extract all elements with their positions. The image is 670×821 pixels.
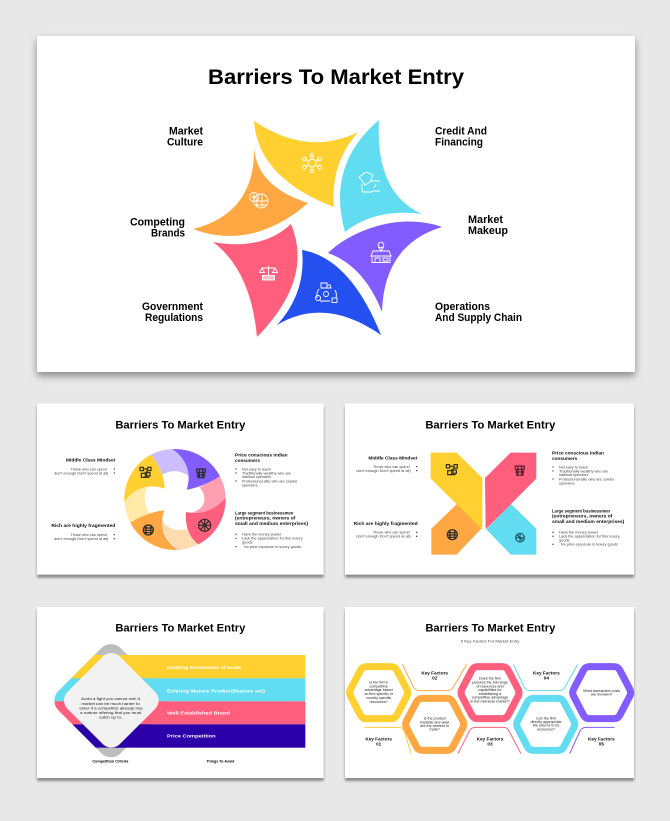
hexagon: key factor 02 <box>406 698 464 750</box>
panel: butterfly x slide <box>345 404 634 578</box>
text block: rich are highly fragmented: Rich are highly fragmented <box>51 523 116 528</box>
text block: rich are highly fragmented: don't enough Don't spend at all) <box>54 537 108 541</box>
hexagon: key factor 01: competitive <box>369 684 388 688</box>
text block: large segment businessmen: (entrepreneurs, owners of <box>235 516 296 521</box>
band: existing economies of scale <box>71 655 306 678</box>
panel: main pinwheel slide <box>37 36 635 376</box>
hexagon: key factor 01 <box>350 667 408 719</box>
label: competing brands: Brands <box>151 228 185 240</box>
text block: large segment businessmen <box>235 510 309 549</box>
label: government regulations: Regulations <box>145 312 203 324</box>
text block: middle class mindset: Those who can spend <box>373 465 410 469</box>
label: key factors 05: Key Factors <box>588 737 615 742</box>
label: key factors 05: 05 <box>599 742 604 747</box>
petal: operations and supply chain (blue) <box>277 250 381 335</box>
slide title: Barriers To Market Entry <box>425 622 555 634</box>
hexagon: key factor 03: possess the full range <box>472 680 508 684</box>
icon: storefront with pin <box>371 242 391 262</box>
icon: hand with cash <box>359 172 380 192</box>
text block: price conscious indian consumers: Price conscious Indian <box>552 451 604 456</box>
hexagon: key factor 03: Does the firm <box>479 677 501 681</box>
hexagon: key factor 03: in the overseas market? <box>470 700 510 704</box>
band: existing mature product <box>54 678 306 702</box>
label: key factors 03 <box>477 737 504 747</box>
hexagon: key factor 01: Is the firm's <box>369 681 388 685</box>
band: price competition <box>49 638 305 763</box>
icon: orange petal <box>143 525 153 535</box>
label: government regulations: Government <box>142 301 203 313</box>
icon: yellow petal <box>140 467 151 477</box>
icon: purple petal <box>197 469 205 478</box>
text block: rich are highly fragmented: Rich are highly fragmented <box>354 521 418 526</box>
label: key factors 04: 04 <box>544 676 549 681</box>
hexagon: key factor 01: resources? <box>370 700 388 704</box>
label: operations and supply chain: Operations <box>435 301 490 313</box>
center diamond callout: Avoid a fight you cannot win! A <box>81 697 141 701</box>
icon: scales of justice <box>260 266 278 280</box>
hexagon: key factor 05: are involved? <box>591 693 613 697</box>
band: well-established brand <box>54 701 306 724</box>
donut chart <box>124 449 226 550</box>
label: key factors 02: 02 <box>432 676 438 681</box>
center diamond callout <box>59 648 164 753</box>
label: competing brands: Competing <box>130 216 185 228</box>
hexagon: key factor 03: capabilities for <box>478 688 502 692</box>
panel: donut slide <box>37 404 324 578</box>
label: competing brands <box>130 216 185 240</box>
hexagon: key factor 03: competitive advantage <box>472 696 508 700</box>
hexagon: key factor 04: the returns to its <box>533 724 559 728</box>
icon: cyan block <box>516 533 524 542</box>
x shape: cyan block <box>486 504 536 555</box>
hexagon: key factor 04: resources? <box>537 728 555 732</box>
text block: price conscious indian consumers: Traditionally wealthy who are <box>242 471 291 475</box>
text block: price conscious indian consumers: Not easy to reach <box>242 467 271 471</box>
hexagon: key factor 03: of resources and <box>476 684 504 688</box>
hexagon: key factor 04 <box>517 698 575 750</box>
band: price competition: Price Competition <box>167 734 216 739</box>
label: key factors 02: Key Factors <box>421 671 448 676</box>
band: existing mature product: Existing Mature Product(feature set) <box>167 688 266 693</box>
label: key factors 01: 01 <box>376 742 382 747</box>
text block: price conscious indian consumers <box>235 453 297 487</box>
x shape: pink block <box>485 453 536 529</box>
hexagon: key factor 04: directly appropriate <box>530 720 562 724</box>
text block: price conscious indian consumers: spenders <box>559 481 575 485</box>
text block: middle class mindset: Those who can spend <box>71 467 107 471</box>
text block: price conscious indian consumers: habitual spenders <box>559 473 588 477</box>
gray diamond backing <box>49 638 173 763</box>
center diamond callout: catch up to. <box>99 716 122 720</box>
icon: yellow block <box>446 465 457 475</box>
petal: government regulations (pink) <box>213 224 298 337</box>
icon: competing brands globe and magnifier <box>250 192 268 208</box>
slide title: Barriers To Market Entry <box>115 622 245 634</box>
text block: rich are highly fragmented: Those who can spend <box>373 531 410 535</box>
text block: middle class mindset: don't enough Don't spend at all) <box>356 469 411 473</box>
text block: rich are highly fragmented: Those who can spend <box>71 533 107 537</box>
text block: price conscious indian consumers: Professional elite who are careful <box>242 479 297 483</box>
text block: price conscious indian consumers <box>552 451 614 485</box>
text block: large segment businessmen: No prior exposure to luxury goods <box>244 545 301 549</box>
label: key factors 02 <box>421 671 448 681</box>
center diamond callout: enter if a competitor already has <box>79 707 143 711</box>
icon: culture flower <box>303 153 321 173</box>
text block: price conscious indian consumers: consumers <box>552 456 578 461</box>
panel: key factors hexagon slide <box>345 607 634 781</box>
label: key factors 01 <box>365 737 392 747</box>
label: market makeup: Makeup <box>468 225 508 237</box>
band: existing economies of scale: Existing Economies of scale <box>167 665 241 670</box>
label: key factors 05 <box>588 737 615 747</box>
label: market makeup: Market <box>468 214 503 226</box>
label: operations and supply chain <box>435 301 522 324</box>
label: key factors 03: Key Factors <box>477 737 504 742</box>
text block: large segment businessmen: goods <box>559 539 570 543</box>
petal: credit and financing (cyan) <box>340 120 422 232</box>
band: well-established brand: Well-Established Brand <box>167 710 230 715</box>
text block: price conscious indian consumers: Traditionally wealthy who are <box>559 469 608 473</box>
panel: competition bars slide <box>37 607 324 781</box>
text block: large segment businessmen: Have the money power <box>242 533 282 537</box>
text block: rich are highly fragmented <box>51 523 116 541</box>
label: market culture <box>167 126 203 148</box>
label: government regulations <box>142 301 203 324</box>
label: key factors 01: Key Factors <box>365 737 392 742</box>
center diamond callout: a mature offering that you must <box>80 711 141 715</box>
label: key factors 04 <box>533 671 560 681</box>
text block: large segment businessmen <box>552 508 625 547</box>
label: market makeup <box>468 214 508 237</box>
text block: large segment businessmen: Lack the appreciation for fine luxury <box>242 537 303 541</box>
label: credit and financing: Financing <box>435 136 483 148</box>
text block: large segment businessmen: Have the money power <box>559 531 599 535</box>
slide title: Barriers To Market Entry <box>115 419 245 431</box>
text block: large segment businessmen: (entrepreneurs, owners of <box>552 514 613 519</box>
subtitle: 5 Key Factors For Market Entry <box>461 639 519 644</box>
text block: rich are highly fragmented <box>354 521 418 539</box>
connector lines <box>365 664 615 754</box>
text block: large segment businessmen: small and medium enterprises) <box>552 519 625 524</box>
label: market culture: Culture <box>167 136 203 148</box>
text block: rich are highly fragmented: don't enough Don't spend at all) <box>356 535 411 539</box>
hexagon: key factor 03 <box>461 667 519 719</box>
text block: price conscious indian consumers: habitual spenders <box>242 475 271 479</box>
text block: price conscious indian consumers: spenders <box>242 483 258 487</box>
hexagon: key factor 01: advantage based <box>365 688 393 692</box>
label: key factors 03: 03 <box>487 742 493 747</box>
caption: competition criteria: Competition Criteria <box>92 760 128 764</box>
petal: market makeup (purple) <box>328 221 442 312</box>
icon: supply chain loop <box>316 283 337 302</box>
label: credit and financing <box>435 126 487 148</box>
hexagon: key factor 02: tradable and what <box>420 720 449 724</box>
hexagon: key factor 01: country specific <box>366 696 391 700</box>
main title: Barriers To Market Entry <box>208 66 464 89</box>
center diamond callout: market can be much harder to <box>81 702 140 706</box>
x shape: orange block <box>431 504 481 555</box>
label: credit and financing: Credit And <box>435 126 487 138</box>
label: key factors 04: Key Factors <box>533 671 560 676</box>
icon: pink petal <box>199 519 211 531</box>
label: operations and supply chain: And Supply Chain <box>435 312 522 324</box>
text block: large segment businessmen: small and medium enterprises) <box>235 521 309 526</box>
hexagon: key factor 02: trade? <box>429 728 440 732</box>
caption: things to avoid: Things To Avoid <box>206 760 234 764</box>
text block: price conscious indian consumers: Professional elite who are careful <box>559 477 614 481</box>
hexagon: key factor 05 <box>573 667 631 719</box>
text block: large segment businessmen: Large segment businessmen <box>235 510 294 515</box>
petal: competing brands (orange) <box>193 145 308 236</box>
x shape: yellow block <box>431 453 482 529</box>
text block: large segment businessmen: Large segment businessmen <box>552 508 610 513</box>
text block: middle class mindset: Middle Class Mindset <box>66 457 116 462</box>
hexagon: key factor 02: are the barriers to <box>420 724 449 728</box>
label: market culture: Market <box>169 126 203 138</box>
text block: middle class mindset <box>356 455 418 473</box>
text block: middle class mindset: don't enough Don't spend at all) <box>54 471 108 475</box>
icon: pink block <box>515 466 524 475</box>
hexagon: key factor 03: establishing a <box>479 692 502 696</box>
text block: large segment businessmen: Lack the appreciation for fine luxury <box>559 535 620 539</box>
petal: market culture (yellow) <box>254 121 358 207</box>
text block: price conscious indian consumers: Not easy to reach <box>559 465 588 469</box>
hexagon: key factor 01: on firm specific or <box>364 692 394 696</box>
hexagon: key factor 02: Is the product <box>424 717 446 721</box>
text block: price conscious indian consumers: consumers <box>235 458 261 463</box>
text block: middle class mindset <box>54 457 116 475</box>
text block: large segment businessmen: goods <box>242 541 253 545</box>
hexagon: key factor 04: Can the firm <box>536 716 556 720</box>
text block: middle class mindset: Middle Class Mindset <box>368 455 418 460</box>
text block: price conscious indian consumers: Price conscious Indian <box>235 453 288 458</box>
text block: large segment businessmen: No prior exposure to luxury goods <box>561 543 618 547</box>
slide title: Barriers To Market Entry <box>425 419 555 431</box>
icon: orange block <box>447 530 457 540</box>
hexagon: key factor 05: What transaction costs <box>583 689 620 693</box>
